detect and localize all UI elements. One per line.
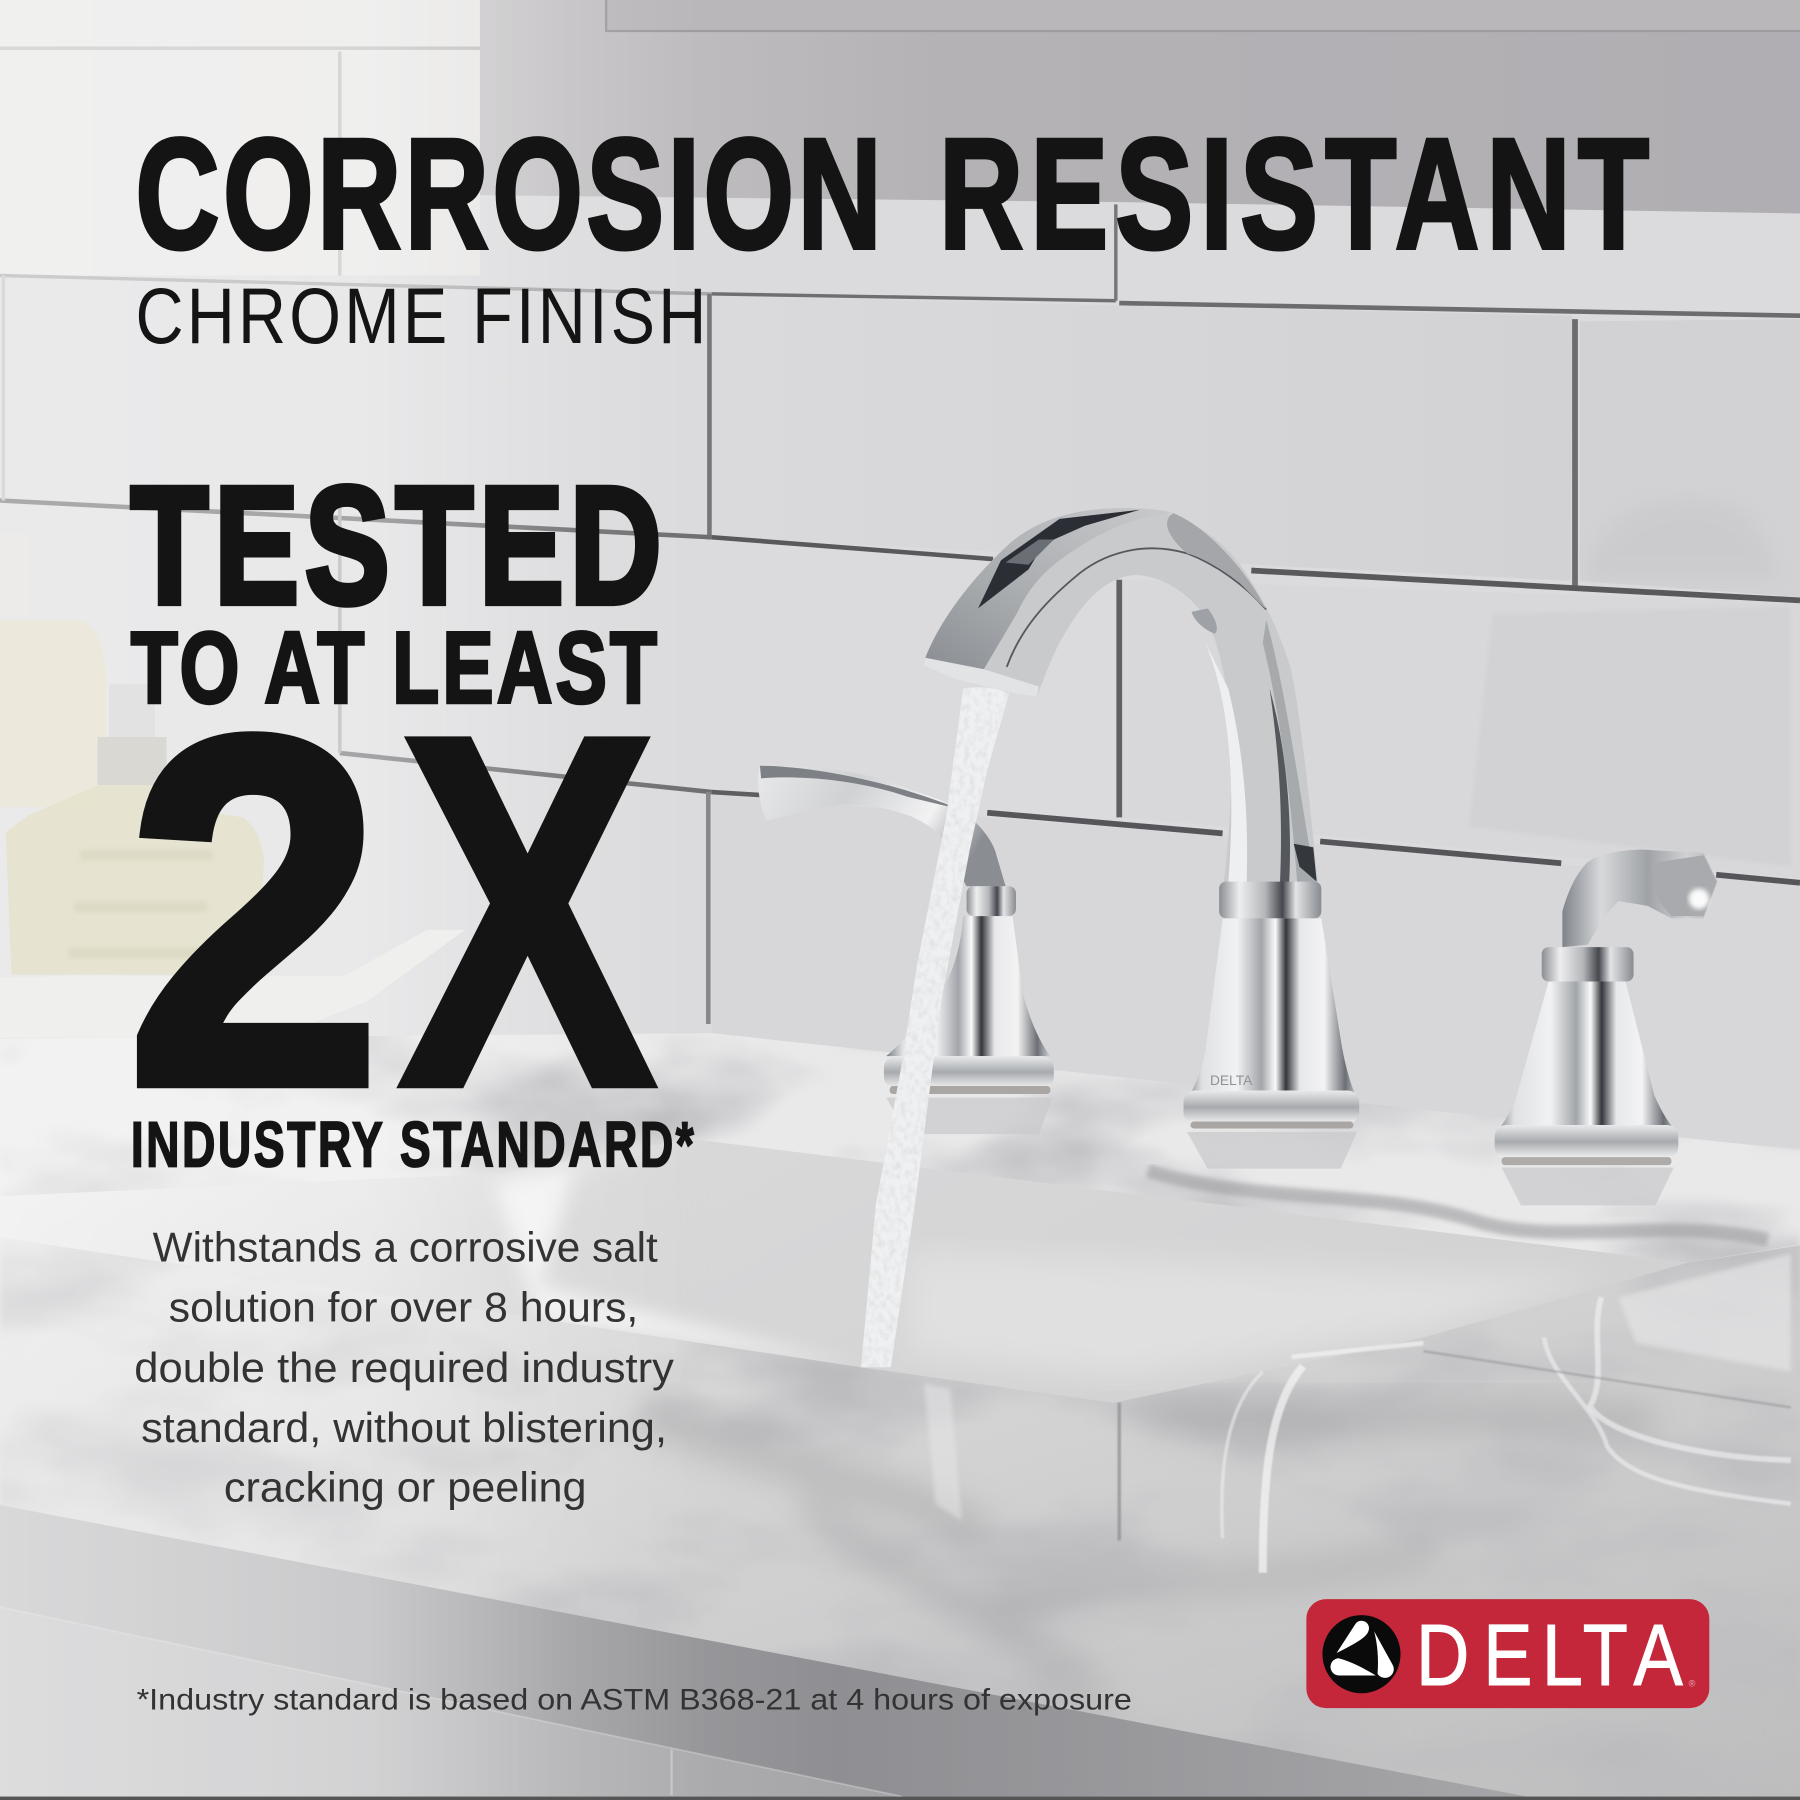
heading: corrosion resistant: RESISTANT	[939, 107, 1656, 282]
icon: delta triangle mark	[1322, 1615, 1401, 1693]
lower cabinet	[0, 1505, 1527, 1797]
registered mark: ®	[1689, 1678, 1696, 1688]
big 2X	[125, 632, 657, 1190]
description text: solution for over 8 hours,	[169, 1284, 638, 1330]
description text: cracking or peeling	[224, 1465, 587, 1511]
grout lines	[0, 48, 1800, 1024]
faucet brand mark: DELTA	[1210, 1073, 1253, 1088]
description text	[134, 1225, 674, 1511]
center spout	[923, 508, 1359, 1169]
tested: TESTED	[131, 453, 661, 639]
counter top marble	[0, 1033, 1800, 1263]
description text: double the required industry	[134, 1345, 674, 1391]
description text: Withstands a corrosive salt	[153, 1225, 658, 1271]
front marble	[0, 1238, 1800, 1797]
running water	[861, 687, 1009, 1519]
claim block	[125, 453, 694, 1190]
footnote: *Industry standard is based on ASTM B368-21 at 4 hours of exposure	[137, 1683, 1132, 1716]
sink basin	[0, 1139, 1688, 1403]
bottom edge	[0, 1797, 1800, 1800]
upper left light tiles	[0, 0, 480, 276]
big 2X: X	[399, 633, 657, 1190]
to at least: TO AT LEAST	[131, 612, 657, 725]
left white wash overlay	[0, 0, 1148, 1800]
upper wall panel	[480, 0, 1800, 214]
left handle	[758, 766, 1054, 1134]
industry standard: INDUSTRY STANDARD*	[131, 1108, 694, 1180]
Delta logo	[1306, 1599, 1709, 1708]
soap bottles and tray	[0, 533, 465, 1038]
tile reflections	[1584, 499, 1779, 580]
wordmark: DELTA	[1416, 1608, 1683, 1705]
faucet	[758, 508, 1717, 1521]
title	[135, 107, 1656, 361]
big 2X: 2	[125, 632, 383, 1189]
subheading: chrome finish: CHROME FINISH	[135, 273, 706, 361]
right handle	[1495, 849, 1717, 1205]
description text: standard, without blistering,	[141, 1405, 667, 1451]
tile shading	[712, 296, 1573, 581]
sink reflections	[1119, 1297, 1791, 1573]
heading: corrosion resistant: CORROSION	[135, 107, 885, 282]
